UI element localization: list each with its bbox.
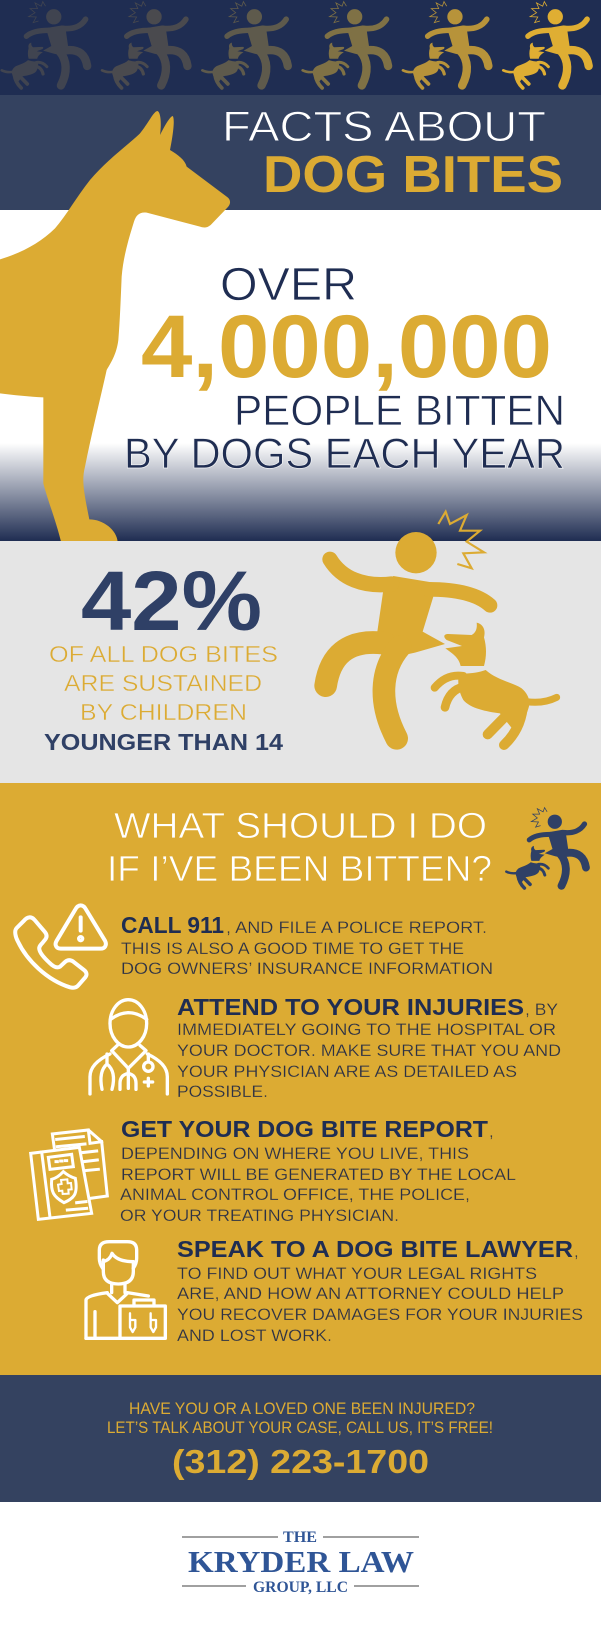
step 2: attend to your injuries: YOUR DOCTOR. MAKE SURE THAT YOU AND <box>177 1042 561 1060</box>
step 3: get your dog bite report: REPORT WILL BE GENERATED BY THE LOCAL <box>121 1166 516 1184</box>
step 3: get your dog bite report: , <box>489 1123 494 1141</box>
icon: figure 5 <box>403 2 488 88</box>
statistic: over 4,000,000: BY DOGS EACH YEAR <box>124 430 565 478</box>
icon: report documents <box>31 1130 107 1219</box>
step 3: get your dog bite report: GET YOUR DOG BITE REPORT <box>121 1116 488 1142</box>
icon: large dog silhouette <box>0 111 230 542</box>
heading: what should I do: WHAT SHOULD I DO <box>114 805 487 846</box>
panel: advice background <box>0 783 601 1375</box>
icon: large man and dog <box>326 512 557 745</box>
step 1: call 911: THIS IS ALSO A GOOD TIME TO GET THE <box>121 940 464 958</box>
step 2: attend to your injuries: ATTEND TO YOUR INJURIES <box>177 994 524 1020</box>
title band background <box>0 95 601 210</box>
step 3: get your dog bite report <box>120 1116 516 1225</box>
step 4: speak to a lawyer: ARE, AND HOW AN ATTORNEY COULD HELP <box>177 1285 564 1303</box>
icon: lawyer with briefcase <box>86 1242 165 1338</box>
step 4: speak to a lawyer: YOU RECOVER DAMAGES FOR YOUR INJURIES <box>177 1306 583 1324</box>
step 4: speak to a lawyer: SPEAK TO A DOG BITE LAWYER <box>177 1236 573 1262</box>
statistic: over 4,000,000: OVER <box>220 258 357 310</box>
step 1: call 911 <box>121 912 493 978</box>
icon: figure 2 <box>102 2 187 88</box>
logo: the Kryder Law Group: KRYDER LAW <box>188 1544 414 1579</box>
step 1: call 911: DOG OWNERS’ INSURANCE INFORMATION <box>121 960 493 978</box>
icon row: fading man and dog figures <box>2 2 589 88</box>
icon: figure 6 <box>503 2 589 88</box>
heading: what should I do: IF I’VE BEEN BITTEN? <box>107 848 492 889</box>
statistic: 42% of bites: YOUNGER THAN 14 <box>44 729 283 755</box>
step 1: call 911: , AND FILE A POLICE REPORT. <box>226 919 487 937</box>
title: FACTS ABOUT <box>222 103 546 151</box>
step 1: call 911: CALL 911 <box>121 912 224 938</box>
panel: 42 percent background <box>0 541 601 783</box>
icon: doctor <box>90 1000 167 1094</box>
panel: call to action background <box>0 1375 601 1502</box>
step 3: get your dog bite report: OR YOUR TREATING PHYSICIAN. <box>120 1207 399 1225</box>
call to action text <box>107 1400 493 1480</box>
icon: small navy man and dog <box>506 808 586 888</box>
statistic: over 4,000,000 <box>124 258 565 478</box>
logo: the Kryder Law Group: GROUP, LLC <box>253 1579 348 1596</box>
statistic: 42% of bites: 42% <box>81 554 262 648</box>
icon: figure 4 <box>303 2 388 88</box>
statistic: 42% of bites <box>44 554 283 755</box>
statistic: 42% of bites: BY CHILDREN <box>80 699 247 725</box>
logo: the Kryder Law Group: THE <box>283 1529 317 1546</box>
step 4: speak to a lawyer: , <box>574 1243 579 1261</box>
step 3: get your dog bite report: ANIMAL CONTROL OFFICE, THE POLICE, <box>120 1186 470 1204</box>
panel: over 4 million white background <box>0 210 601 443</box>
panel: gradient fade <box>0 443 601 541</box>
step 4: speak to a lawyer: TO FIND OUT WHAT YOUR LEGAL RIGHTS <box>177 1265 537 1283</box>
header strip background <box>0 0 601 95</box>
statistic: 42% of bites: ARE SUSTAINED <box>64 670 262 696</box>
step 2: attend to your injuries: , BY <box>525 1001 558 1019</box>
statistic: over 4,000,000: PEOPLE BITTEN <box>234 387 565 435</box>
step 2: attend to your injuries: IMMEDIATELY GOING TO THE HOSPITAL OR <box>177 1021 556 1039</box>
title <box>222 103 563 204</box>
statistic: 42% of bites: OF ALL DOG BITES <box>49 641 278 667</box>
icon: phone and warning <box>15 905 106 988</box>
heading: what should I do <box>107 805 492 889</box>
icon: figure 1 <box>2 2 87 88</box>
call to action text: HAVE YOU OR A LOVED ONE BEEN INJURED? <box>129 1400 475 1418</box>
step 4: speak to a lawyer: AND LOST WORK. <box>177 1327 332 1345</box>
icon: figure 3 <box>202 2 288 88</box>
title: DOG BITES <box>263 146 563 204</box>
step 3: get your dog bite report: DEPENDING ON WHERE YOU LIVE, THIS <box>121 1145 469 1163</box>
step 4: speak to a lawyer <box>177 1236 583 1345</box>
logo: the Kryder Law Group <box>182 1529 419 1596</box>
step 2: attend to your injuries <box>177 994 561 1101</box>
statistic: over 4,000,000: 4,000,000 <box>141 296 552 396</box>
call to action text: LET’S TALK ABOUT YOUR CASE, CALL US, IT’S FREE! <box>107 1419 493 1437</box>
call to action text: (312) 223-1700 <box>172 1443 429 1480</box>
step 2: attend to your injuries: YOUR PHYSICIAN ARE AS DETAILED AS <box>177 1063 517 1081</box>
step 2: attend to your injuries: POSSIBLE. <box>177 1083 268 1101</box>
